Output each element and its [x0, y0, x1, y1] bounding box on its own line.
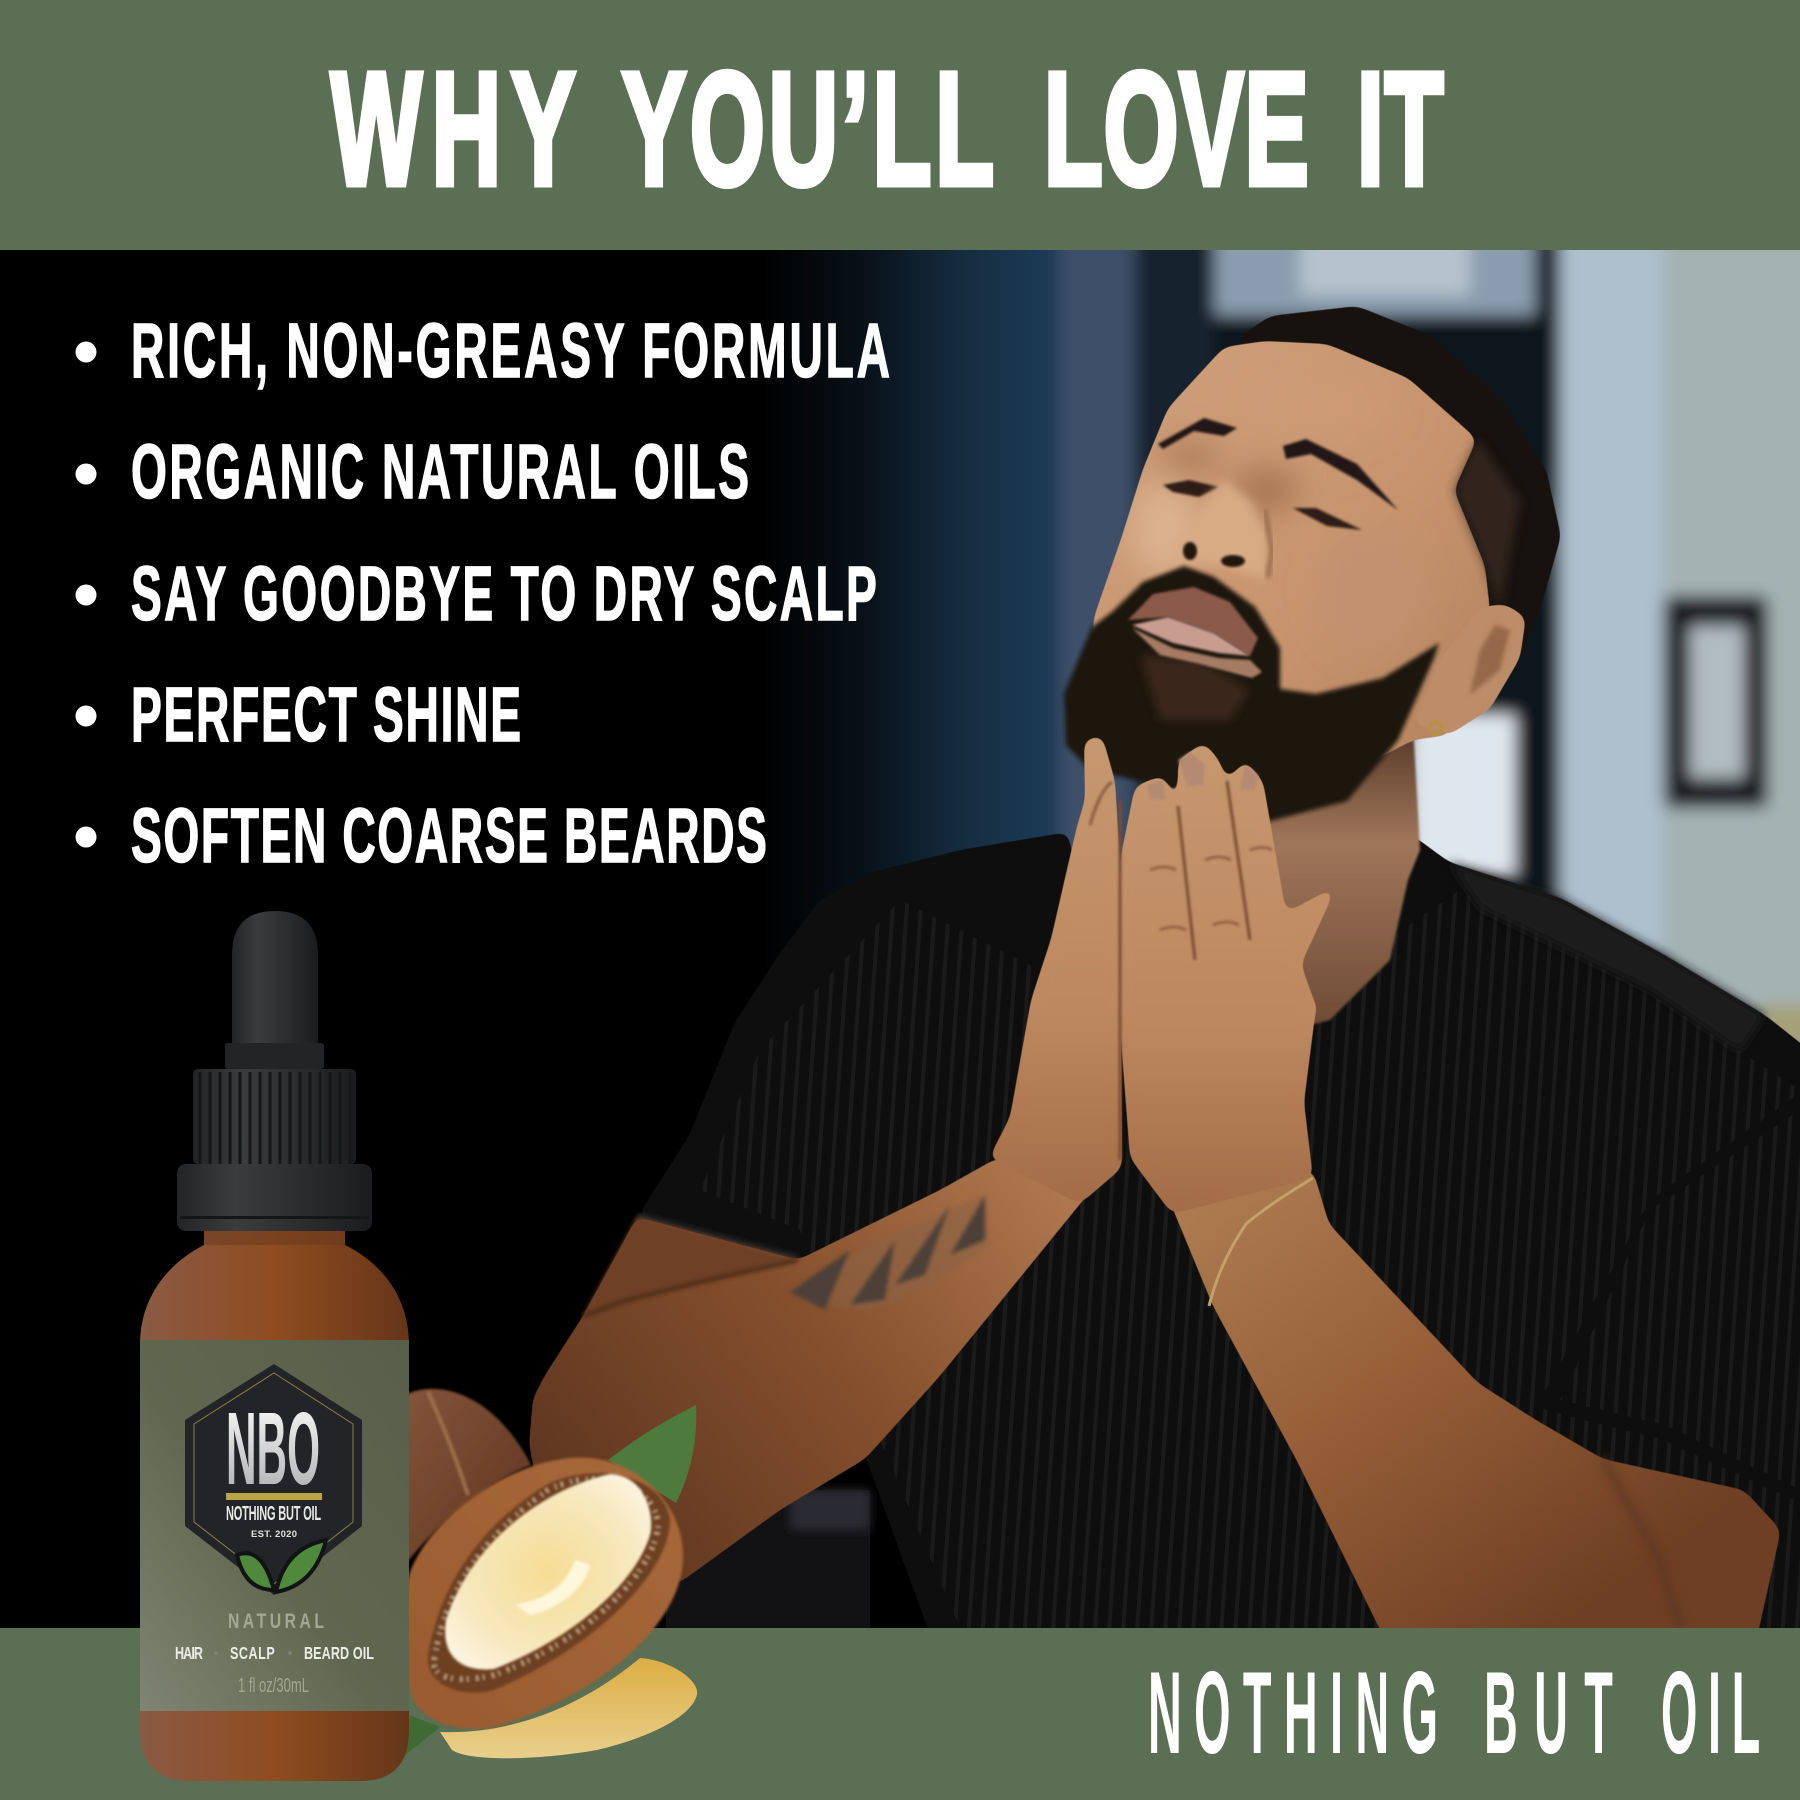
- knurled cap: [193, 1069, 356, 1164]
- nostrils: [1183, 542, 1197, 560]
- brand name: OIL: [1661, 1647, 1760, 1778]
- face shading: [1118, 433, 1304, 576]
- fade to black: [500, 250, 1060, 1628]
- shell inner: [428, 1473, 670, 1693]
- use line: SCALP: [230, 1644, 275, 1664]
- header band: [0, 0, 1800, 250]
- established: EST. 2020: [251, 1529, 297, 1540]
- lips: [1128, 587, 1258, 656]
- title: LOVE: [1044, 40, 1309, 218]
- argan nuts: [398, 1389, 697, 1761]
- title: YOU’LL: [622, 40, 994, 218]
- use line: HAIR: [175, 1644, 203, 1664]
- right hand: [1118, 742, 1337, 1214]
- glass body: [140, 1231, 409, 1781]
- title: [331, 40, 1443, 218]
- right arm: [1165, 1170, 1781, 1660]
- oil highlight: [515, 1560, 590, 1615]
- hair: [1224, 306, 1561, 660]
- fingernails: [1147, 752, 1258, 800]
- nose: [1175, 480, 1268, 580]
- benefits list: [76, 309, 890, 879]
- neck: [1190, 724, 1420, 1030]
- top leaf: [608, 1405, 696, 1503]
- chair behind arm: [666, 1490, 870, 1628]
- benefit 4: PERFECT SHINE: [131, 673, 521, 758]
- earring: [1430, 722, 1442, 734]
- oil puddle: [440, 1658, 697, 1758]
- footer band: [0, 1628, 1800, 1800]
- sleeve hem: [637, 1217, 798, 1260]
- benefit 1: RICH, NON-GREASY FORMULA: [131, 309, 890, 394]
- fade shadow at temple: [1454, 439, 1520, 610]
- tattoo: [790, 1195, 990, 1310]
- fibres: [434, 1479, 658, 1679]
- label: [140, 1340, 409, 1711]
- shoulder seam: [1449, 862, 1765, 1052]
- brand name: BUT: [1484, 1647, 1613, 1778]
- product bottle: [140, 911, 409, 1781]
- photo background: [0, 200, 1800, 1628]
- man photo illustration: [529, 306, 1800, 1660]
- brand name: [1148, 1647, 1760, 1778]
- hex logo: [185, 1364, 362, 1595]
- leaves icon: [237, 1540, 326, 1592]
- back nut: [405, 1389, 531, 1565]
- bottom leaf: [398, 1715, 440, 1761]
- soul patch: [1140, 655, 1250, 720]
- benefit 2: ORGANIC NATURAL OILS: [131, 430, 749, 515]
- title: IT: [1357, 40, 1443, 218]
- black t-shirt: [637, 832, 1800, 1660]
- use line: BEARD OIL: [304, 1644, 374, 1664]
- shell: [405, 1457, 683, 1729]
- natural: NATURAL: [228, 1609, 324, 1633]
- dropper bulb: [232, 911, 318, 1043]
- dropper collar: [225, 1043, 324, 1069]
- hex logo: NBO: [226, 1391, 320, 1506]
- ear: [1413, 604, 1526, 735]
- knuckles: [1150, 848, 1272, 930]
- use line: [175, 1644, 374, 1664]
- benefit 3: SAY GOODBYE TO DRY SCALP: [131, 552, 877, 637]
- face: [1092, 341, 1490, 800]
- gold bar: [226, 1493, 322, 1500]
- finger creases: [1120, 781, 1250, 1160]
- eyebrows: [1158, 418, 1237, 449]
- cap flange: [177, 1164, 372, 1231]
- bracelet: [1209, 1178, 1313, 1306]
- left hand: [989, 735, 1122, 1204]
- arm crease: [1603, 1459, 1680, 1628]
- beard: [1064, 566, 1439, 821]
- title: WHY: [331, 40, 575, 218]
- volume: 1 fl oz/30mL: [238, 1675, 309, 1697]
- brand name: NOTHING: [1148, 1647, 1438, 1778]
- eyes: [1163, 480, 1219, 497]
- left arm: [529, 1158, 1100, 1584]
- chin skin: [1132, 628, 1262, 678]
- shirt sleeve right: [1536, 1050, 1800, 1530]
- benefit 5: SOFTEN COARSE BEARDS: [131, 794, 767, 879]
- logo name: NOTHING BUT OIL: [226, 1503, 321, 1525]
- head: [1064, 306, 1561, 821]
- kernel: [445, 1474, 651, 1669]
